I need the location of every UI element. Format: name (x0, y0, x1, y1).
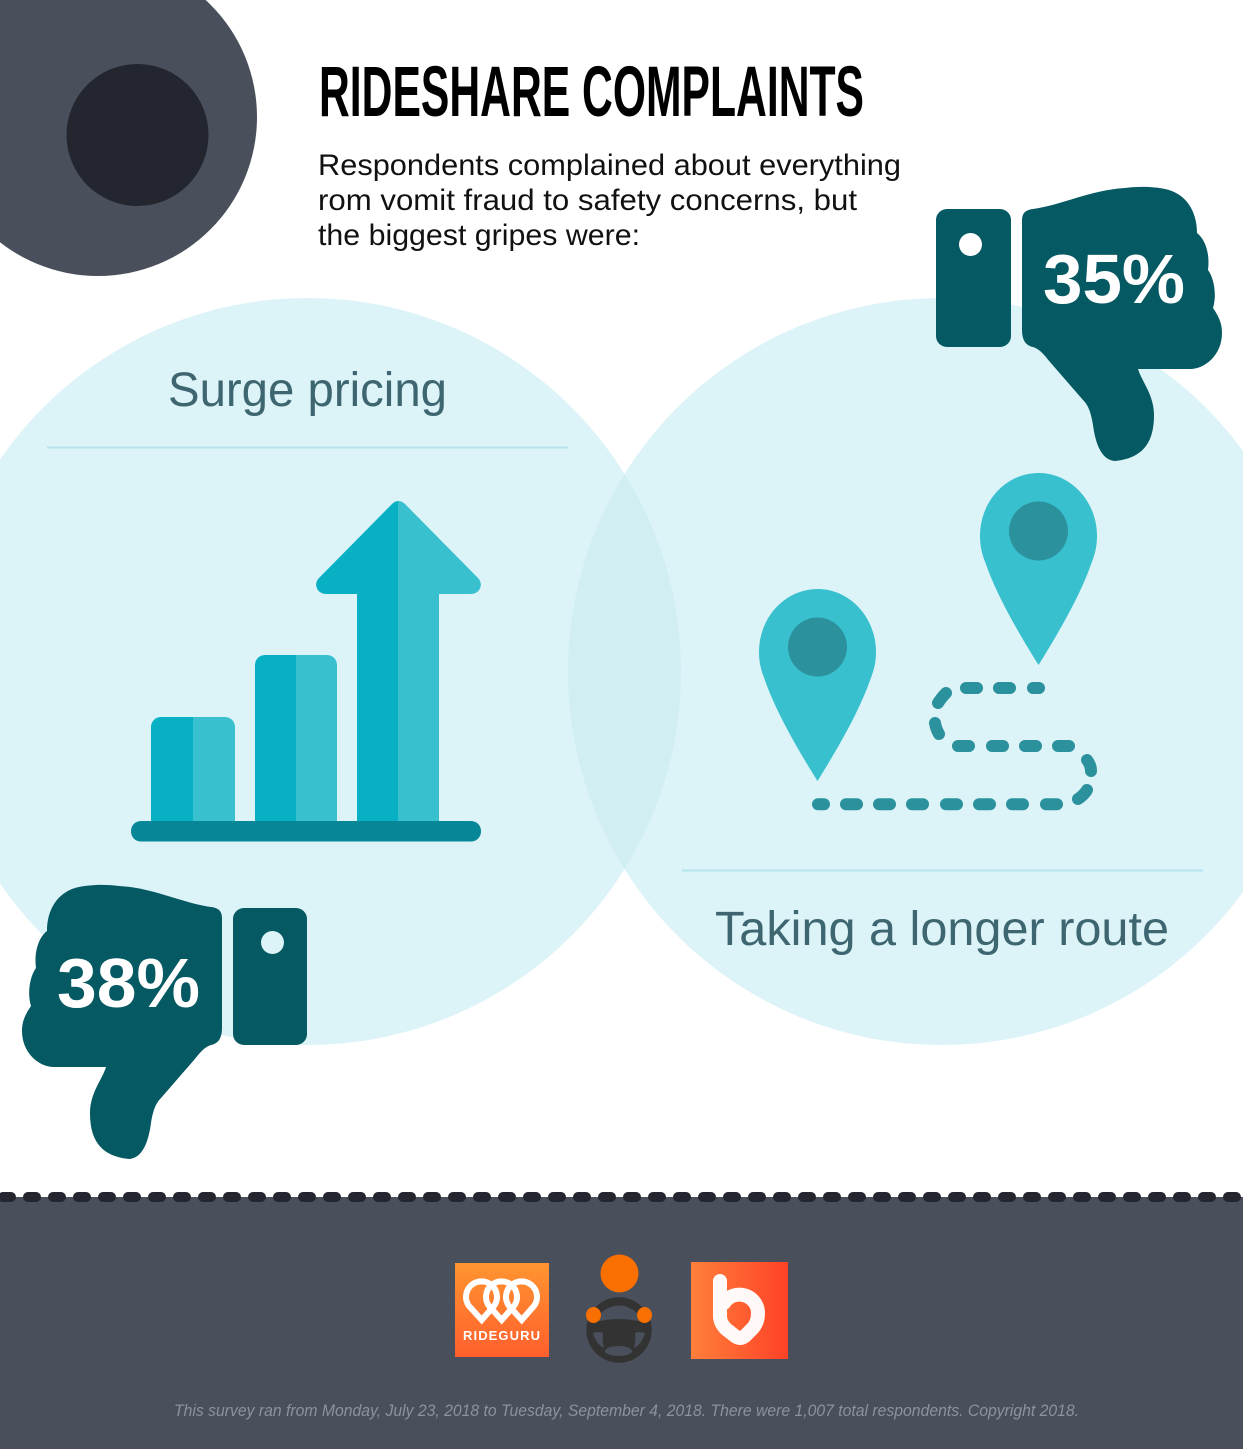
intro text: the biggest gripes were: (318, 219, 640, 252)
stat: 35%: 35% (1043, 240, 1185, 318)
icon: thumbs down 38% (22, 885, 307, 1159)
icon: origin map pin (759, 589, 876, 781)
footer panel (0, 1197, 1243, 1449)
icon: rising bar chart with arrow (131, 501, 481, 842)
circle overlap (568, 474, 681, 868)
logo: orange b pin (691, 1262, 788, 1359)
heading: surge pricing: Surge pricing (168, 364, 447, 417)
heading: taking a longer route: Taking a longer route (715, 903, 1169, 956)
logo: RideGuru: RIDEGURU (463, 1328, 540, 1343)
dashed route line (818, 688, 1091, 804)
survey note: This survey ran from Monday, July 23, 2018 to Tuesday, September 4, 2018. There were 1,007 total respondents. Copyright 2018. (174, 1401, 1079, 1420)
intro text (318, 149, 901, 252)
intro text: Respondents complained about everything (318, 149, 901, 182)
icon: thumbs down 35% (936, 187, 1222, 461)
divider above longer route label (682, 870, 1203, 872)
icon: destination map pin (980, 473, 1097, 665)
intro text: rom vomit fraud to safety concerns, but (318, 184, 858, 217)
decorative dark circle (0, 0, 257, 276)
panel: surge pricing circle (0, 298, 681, 1045)
panel: longer route circle (568, 298, 1243, 1045)
logo: driver at steering wheel (586, 1254, 652, 1363)
title: RIDESHARE COMPLAINTS (319, 53, 864, 132)
stat: 38%: 38% (57, 944, 200, 1022)
logo: RideGuru (455, 1263, 549, 1357)
